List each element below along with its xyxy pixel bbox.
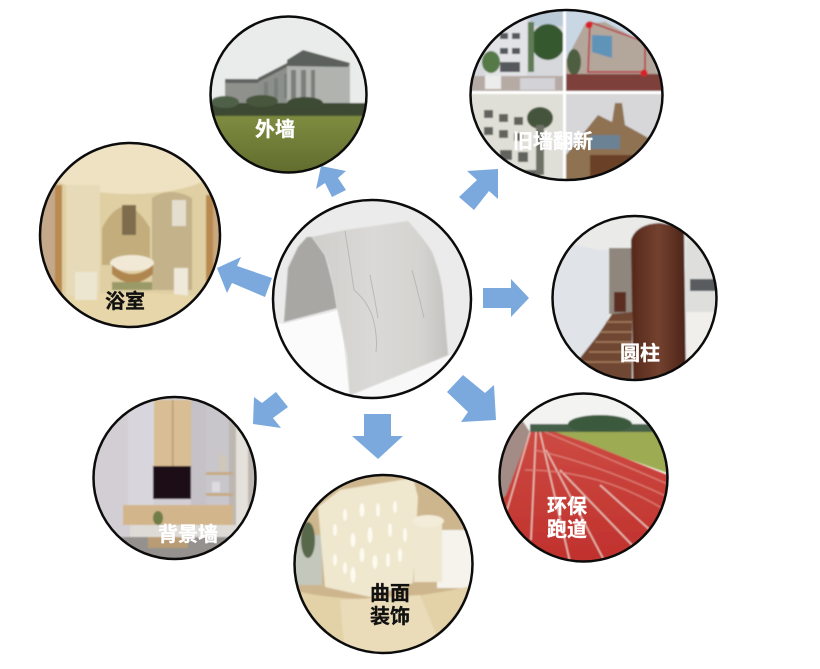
arrow: to feature wall <box>253 392 288 428</box>
panel: eco running track <box>497 391 671 564</box>
arrow: to old wall renovation <box>459 169 498 210</box>
label: 圆柱 <box>620 342 660 365</box>
ring <box>552 216 716 380</box>
panel: feature wall <box>92 395 257 562</box>
label <box>547 495 587 541</box>
panel: exterior wall <box>208 14 370 176</box>
ring <box>94 397 256 559</box>
ring <box>294 475 472 653</box>
arrow: to column <box>483 279 529 317</box>
arrow: to exterior wall <box>316 166 346 197</box>
ring <box>273 200 471 398</box>
label line 2: 装饰 <box>370 605 410 628</box>
label: 浴室 <box>105 289 145 313</box>
label: 外墙 <box>255 118 295 141</box>
arrow: to running track <box>447 375 496 422</box>
photo: wood-clad round column and stairs <box>550 214 720 382</box>
photo: perforated curved wall <box>292 473 475 655</box>
label line 1: 曲面 <box>370 582 410 605</box>
ring <box>40 143 220 327</box>
label: 背景墙 <box>158 523 218 546</box>
panel: central flexible stone sample <box>270 198 474 402</box>
panel: old wall renovation <box>468 7 665 182</box>
ring <box>210 16 366 172</box>
ring <box>500 394 668 562</box>
photo: four building views <box>468 7 665 182</box>
panel: bathroom <box>38 141 223 329</box>
panel: curved decoration <box>292 473 475 655</box>
photo: hotel building and lawn <box>208 14 370 176</box>
label line 2: 跑道 <box>547 518 587 541</box>
label <box>370 582 410 628</box>
ring <box>470 10 662 180</box>
photo: red running track <box>497 391 671 564</box>
photo: living room TV wall <box>92 395 257 562</box>
label line 1: 环保 <box>547 495 587 518</box>
panel: column <box>550 214 720 382</box>
photo: bathroom interior <box>38 141 223 329</box>
photo: curved stone sheet <box>270 198 474 402</box>
label: 旧墙翻新 <box>513 130 593 153</box>
arrow: to curved decoration <box>352 414 403 459</box>
arrow: to bathroom <box>217 257 272 297</box>
